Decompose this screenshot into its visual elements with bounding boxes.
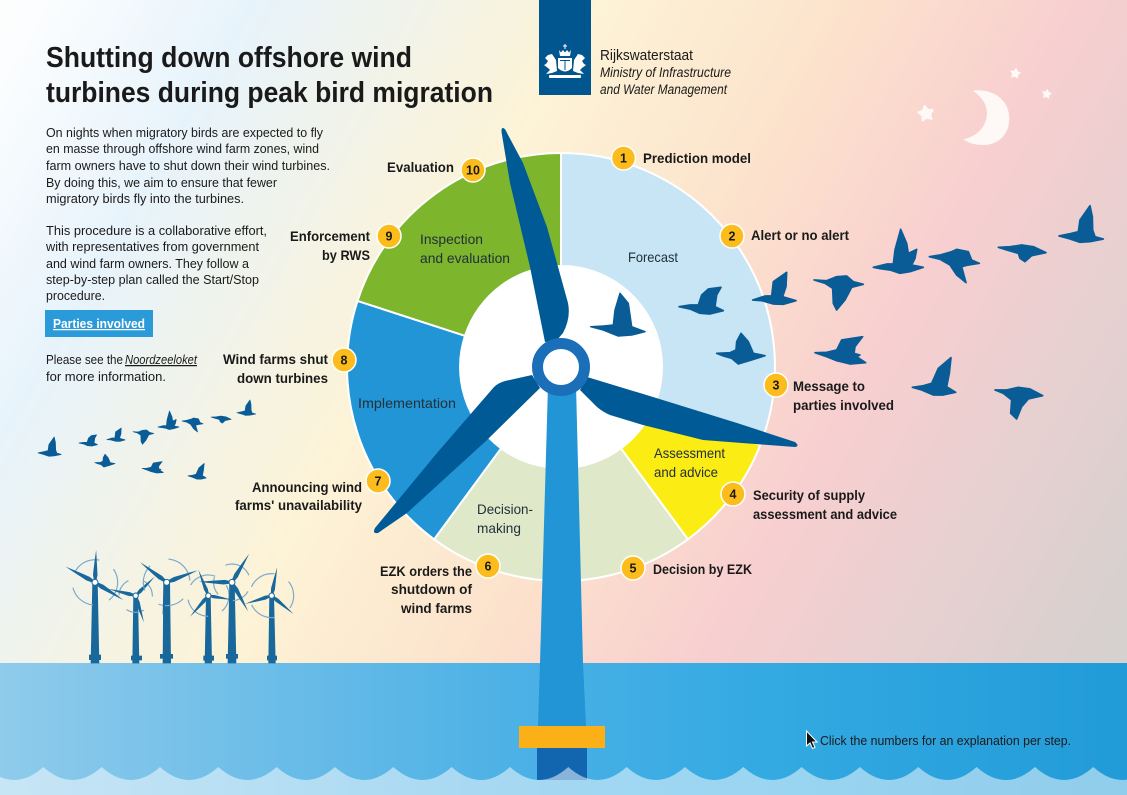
more information text: Noordzeeloket xyxy=(125,353,197,367)
logo: Rijkswaterstaat xyxy=(539,0,731,97)
blade: right xyxy=(580,377,798,447)
button: parties involved xyxy=(45,310,153,337)
icon: mouse cursor xyxy=(806,731,817,748)
instruction text: Click the numbers for an explanation per step. xyxy=(820,734,1071,748)
step 1: Prediction model xyxy=(643,150,751,166)
step 5: Decision by EZK xyxy=(653,561,752,577)
title xyxy=(46,42,493,109)
intro text: By doing this, we aim to ensure that fewer xyxy=(46,176,277,190)
segment: inspection and evaluation xyxy=(358,153,561,336)
step 8: down turbines xyxy=(237,370,328,386)
procedure text: This procedure is a collaborative effort, xyxy=(46,224,267,238)
step 10 xyxy=(387,158,485,182)
more information text: for more information. xyxy=(46,370,166,384)
step 7: 7 xyxy=(375,474,382,488)
procedure text: and wind farm owners. They follow a xyxy=(46,257,249,271)
right flock of birds xyxy=(679,206,1103,419)
segment labels: making xyxy=(477,520,521,536)
button: parties involved: Parties involved xyxy=(53,317,145,331)
intro text: migratory birds fly into the turbines. xyxy=(46,192,244,206)
step 4: 4 xyxy=(730,488,737,502)
segment labels: Implementation xyxy=(358,395,456,411)
step 3 xyxy=(764,373,894,413)
step 2 xyxy=(720,224,849,248)
step 6: wind farms xyxy=(400,600,472,616)
step 6: EZK orders the xyxy=(380,563,472,579)
intro text: farm owners have to shut down their wind turbines. xyxy=(46,159,330,173)
step 4 xyxy=(721,482,897,522)
segment labels: Assessment xyxy=(654,445,725,461)
procedure text: with representatives from government xyxy=(45,240,260,254)
segment: forecast xyxy=(561,153,775,445)
step 3: Message to xyxy=(793,378,865,394)
step 4: assessment and advice xyxy=(753,506,897,522)
left flock of birds xyxy=(38,400,256,479)
small turbine 4 xyxy=(180,567,237,663)
step 1: 1 xyxy=(620,152,627,166)
step 9: Enforcement xyxy=(290,228,370,244)
small turbine 6 xyxy=(241,565,303,663)
step 7: Announcing wind xyxy=(252,479,362,495)
step 1 xyxy=(612,146,751,170)
small turbine 1 xyxy=(64,550,125,663)
large turbine tower xyxy=(537,385,587,780)
small wind farm xyxy=(64,550,303,663)
segment labels: and advice xyxy=(654,464,718,480)
step 4: Security of supply xyxy=(753,487,865,503)
step markers and labels xyxy=(223,146,897,616)
procedure text: procedure. xyxy=(46,289,105,303)
step 8: 8 xyxy=(341,354,348,368)
intro text: en masse through offshore wind farm zones, wind xyxy=(46,142,319,156)
ministry name: Ministry of Infrastructure xyxy=(600,65,731,80)
step 3: 3 xyxy=(773,378,780,392)
icon: small star xyxy=(1042,89,1052,98)
segment: decision-making xyxy=(434,448,688,581)
step 9 xyxy=(290,224,401,263)
intro text xyxy=(46,126,330,206)
segment labels: and evaluation xyxy=(420,250,510,266)
segment labels: Inspection xyxy=(420,231,483,247)
bird at turbine hub xyxy=(591,293,645,336)
step 10: Evaluation xyxy=(387,159,454,175)
small turbine 2 xyxy=(108,573,158,663)
ministry name: Rijkswaterstaat xyxy=(600,48,693,64)
step 8 xyxy=(223,348,356,386)
segment: implementation xyxy=(347,301,501,539)
wheel centre xyxy=(459,265,663,469)
more information text: Please see the xyxy=(46,353,123,367)
procedure text xyxy=(45,224,267,303)
large turbine rotor xyxy=(374,128,798,533)
step 2: Alert or no alert xyxy=(751,227,849,243)
small turbine 3 xyxy=(137,552,199,663)
step 9: by RWS xyxy=(322,247,370,263)
title: turbines during peak bird migration xyxy=(46,77,493,109)
icon: coat of arms xyxy=(544,44,586,78)
blade: left xyxy=(374,375,540,533)
hub xyxy=(538,344,584,390)
moon and stars xyxy=(917,68,1052,145)
ministry name xyxy=(600,48,731,97)
step 9: 9 xyxy=(386,230,393,244)
icon: large star xyxy=(917,104,935,121)
step 5: 5 xyxy=(630,562,637,576)
logo ribbon xyxy=(539,0,591,95)
segment: assessment and advice xyxy=(621,404,760,539)
step 10: 10 xyxy=(466,164,480,178)
step 2: 2 xyxy=(729,230,736,244)
step 6: shutdown of xyxy=(391,581,472,597)
step 6: 6 xyxy=(485,560,492,574)
waves xyxy=(0,767,1127,795)
ministry name: and Water Management xyxy=(600,82,728,97)
icon: moon xyxy=(963,90,1009,145)
step 6 xyxy=(380,554,500,616)
procedure text: step-by-step plan called the Start/Stop xyxy=(46,273,259,287)
sea xyxy=(0,663,1127,795)
blade: upper xyxy=(502,128,569,342)
icon: star xyxy=(1010,68,1021,78)
segment labels: Forecast xyxy=(628,249,678,265)
panel: process wheel xyxy=(347,153,775,581)
step 5 xyxy=(621,556,752,580)
step 7: farms' unavailability xyxy=(235,497,362,513)
title: Shutting down offshore wind xyxy=(46,42,412,74)
small turbine 5 xyxy=(199,553,253,663)
segment labels: Decision- xyxy=(477,501,533,517)
more information text xyxy=(46,353,197,384)
segment labels xyxy=(358,231,725,536)
foundation platform xyxy=(519,726,605,748)
intro text: On nights when migratory birds are expected to fly xyxy=(46,126,324,140)
step 8: Wind farms shut xyxy=(223,351,328,367)
step 7 xyxy=(235,469,390,513)
step 3: parties involved xyxy=(793,397,894,413)
